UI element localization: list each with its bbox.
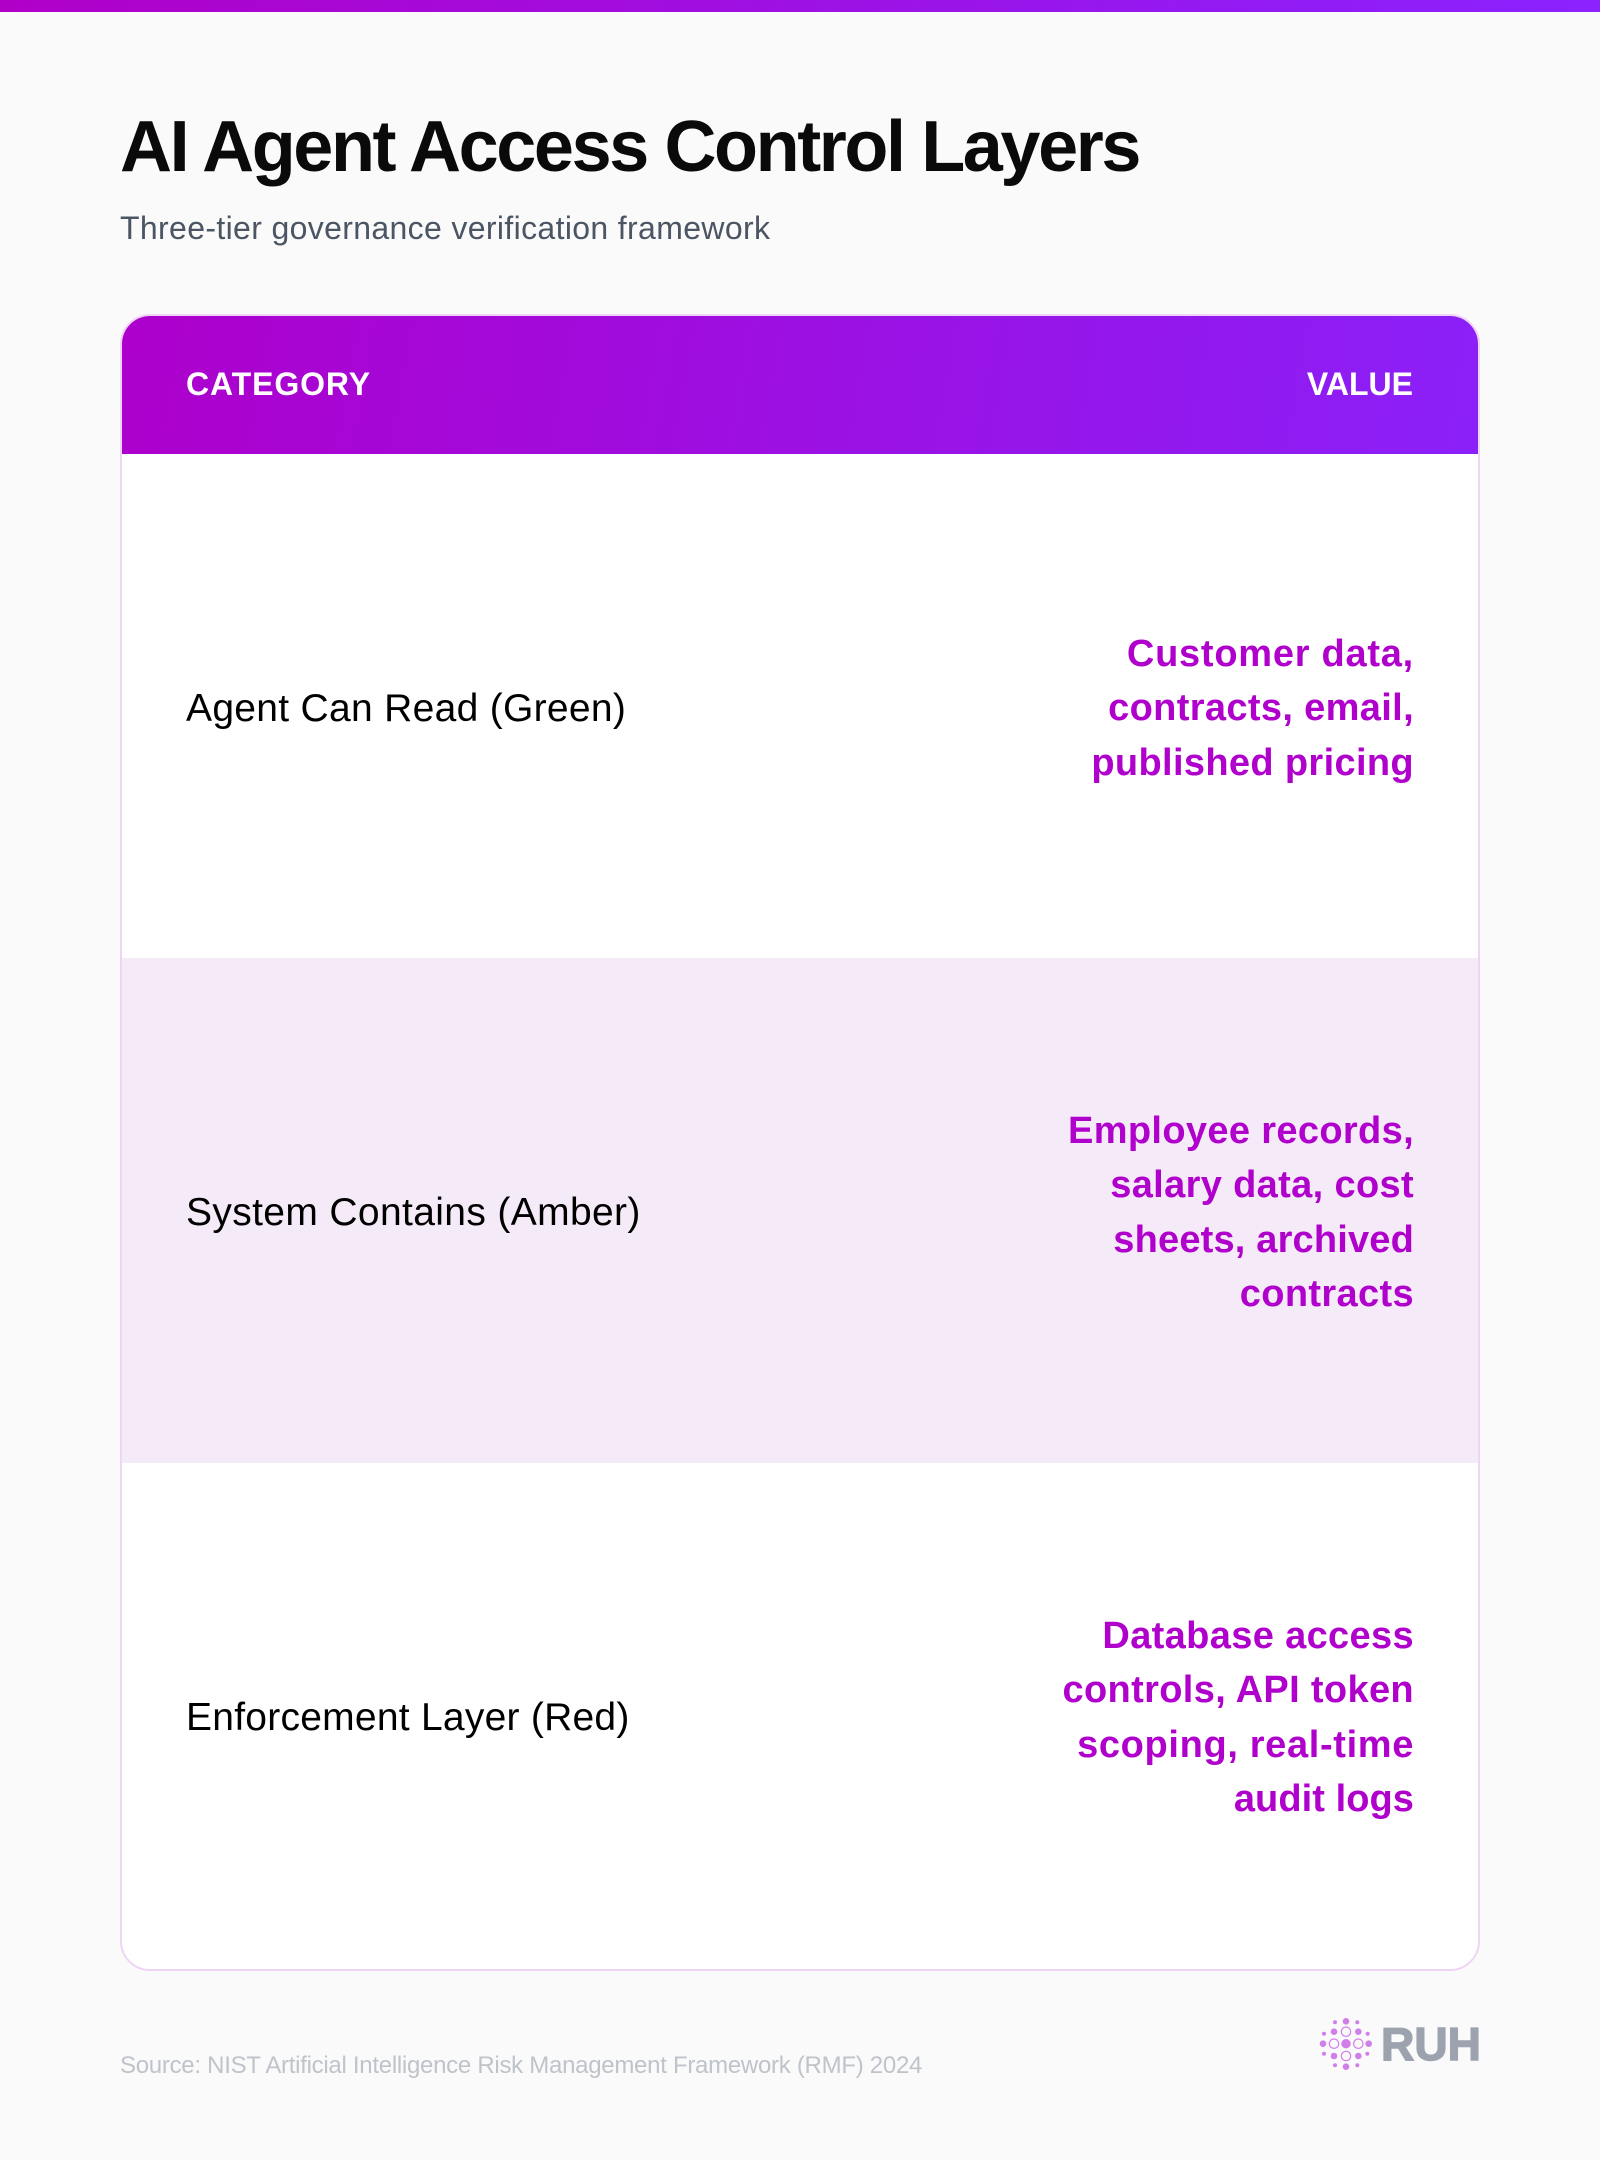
row value <box>1062 1615 1414 1820</box>
row: system contains <box>122 958 1478 1463</box>
title: AI Agent Access Control Layers <box>120 107 1139 187</box>
table card <box>120 314 1480 1971</box>
row value: scoping, real-time <box>1077 1724 1414 1766</box>
row value <box>1068 1110 1414 1315</box>
row value: sheets, archived <box>1113 1219 1414 1261</box>
row value: audit logs <box>1234 1778 1414 1820</box>
row value: salary data, cost <box>1110 1164 1414 1206</box>
row value: published pricing <box>1091 742 1414 784</box>
header label: value: VALUE <box>1307 366 1413 402</box>
row value <box>1091 633 1414 784</box>
logo mark <box>1320 2018 1372 2070</box>
subtitle: Three-tier governance verification framework <box>120 210 770 246</box>
row: enforcement layer <box>122 1463 1478 1969</box>
row value: controls, API token <box>1062 1669 1414 1711</box>
header label: category: CATEGORY <box>186 366 371 402</box>
row label: System Contains (Amber) <box>186 1191 641 1234</box>
logo wordmark: RUH <box>1381 2018 1481 2070</box>
row value: contracts, email, <box>1108 687 1414 729</box>
row value: Database access <box>1102 1615 1414 1657</box>
row value: Employee records, <box>1068 1110 1414 1152</box>
row label: Agent Can Read (Green) <box>186 687 626 730</box>
row label: Enforcement Layer (Red) <box>186 1696 630 1739</box>
logo: RUH <box>1320 2018 1481 2070</box>
row value: Customer data, <box>1127 633 1414 675</box>
row: agent can read <box>122 454 1478 958</box>
table header <box>122 316 1478 454</box>
top accent bar <box>0 0 1600 12</box>
row value: contracts <box>1240 1273 1414 1315</box>
source note: Source: NIST Artificial Intelligence Risk Management Framework (RMF) 2024 <box>120 2052 922 2079</box>
